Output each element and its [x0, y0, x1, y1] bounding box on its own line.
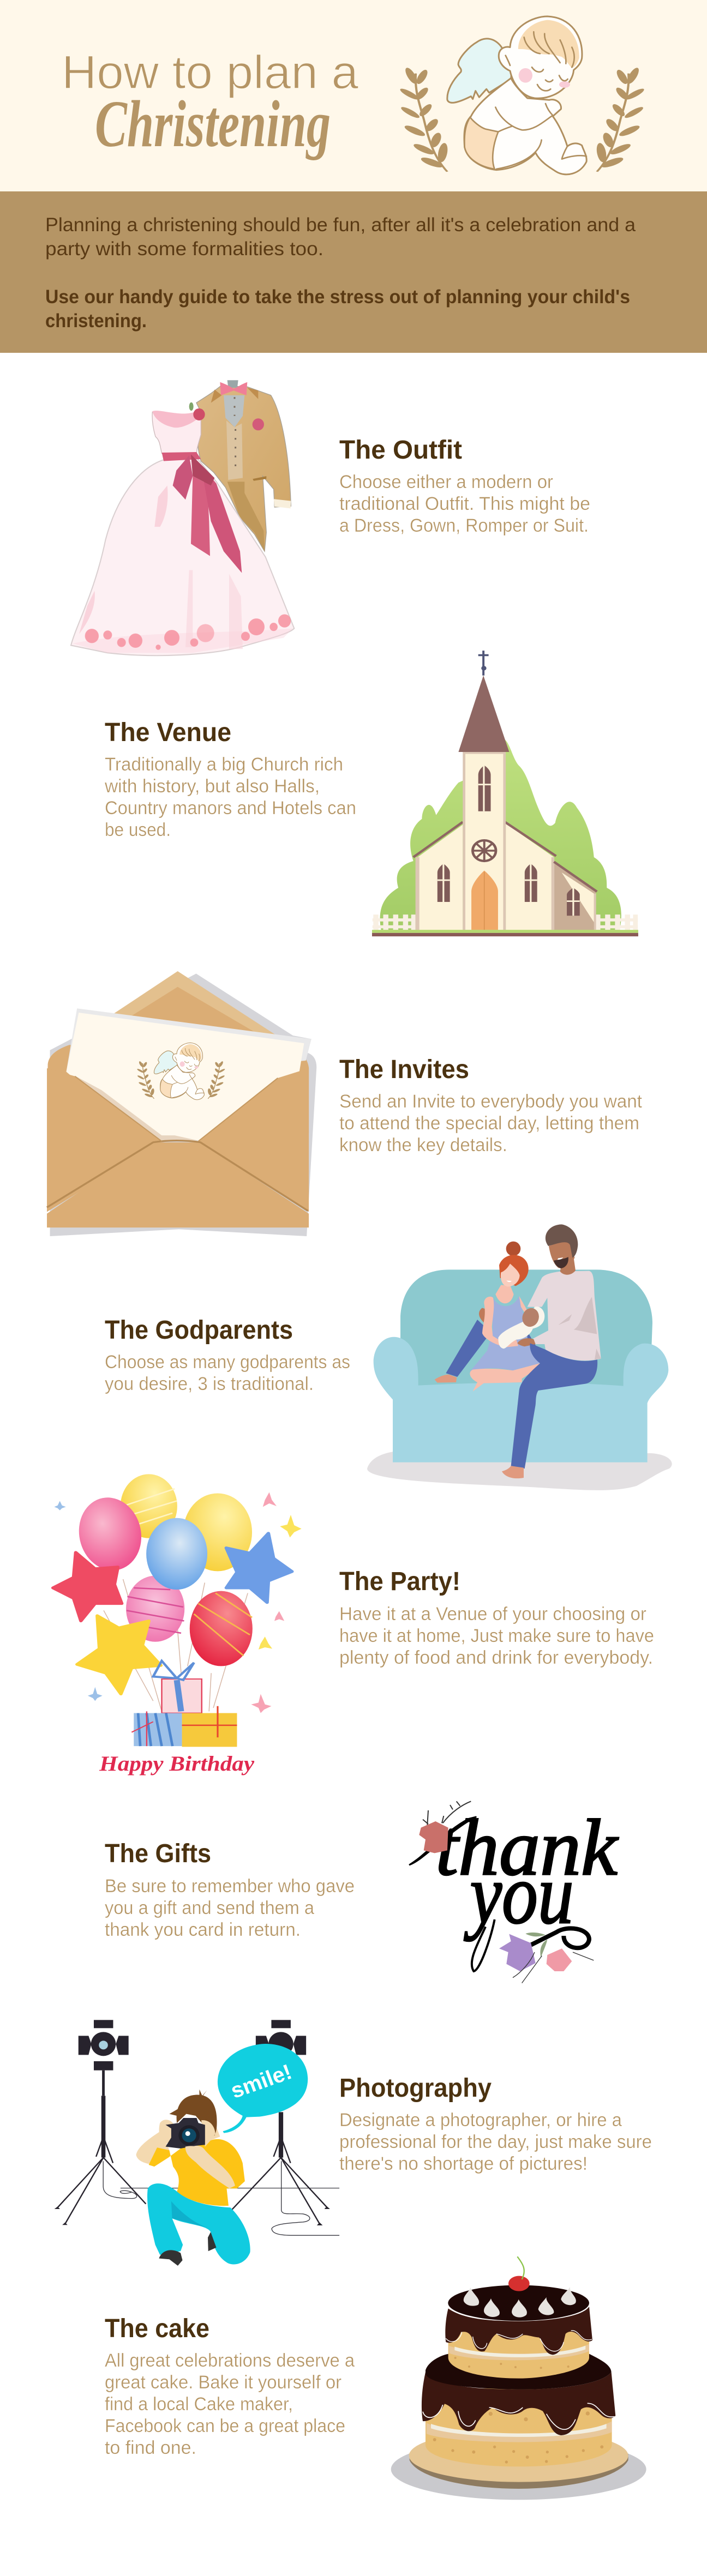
body text: [339, 1091, 643, 1155]
floor shadow: [367, 1450, 672, 1490]
intro text block: party with some formalities too.: [45, 238, 323, 260]
balloon: big yellow: [183, 1493, 252, 1571]
swash: tail and loop: [531, 1928, 589, 1948]
body text: plenty of food and drink for everybody.: [339, 1647, 653, 1668]
left flap: [47, 1068, 161, 1212]
sponge speckles: [433, 2357, 603, 2464]
neck: [205, 2127, 220, 2147]
woman's far leg: [446, 1320, 491, 1377]
balloon: yellow striped: [121, 1474, 177, 1538]
heading: The Godparents: [105, 1316, 293, 1345]
illustration: parents with baby on sofa: [367, 1224, 672, 1490]
swash: bar: [409, 1817, 476, 1865]
ribbon bow: [153, 1661, 194, 1680]
woman's face: [501, 1263, 520, 1286]
text: Happy Birthday: Happy Birthday: [99, 1751, 254, 1775]
lower tier icing highlight: [423, 2403, 615, 2429]
body text: Traditionally a big Church rich: [105, 754, 343, 775]
upper tier filling: [449, 2344, 589, 2360]
body text: to attend the special day, letting them: [339, 1113, 639, 1134]
panel: the cake: [105, 2256, 646, 2500]
diaper: [464, 117, 498, 169]
man's neck: [560, 1258, 576, 1275]
pocket flap: [253, 476, 266, 481]
card: [66, 1013, 304, 1141]
heading: The Outfit: [339, 436, 462, 465]
lower tier filling: [427, 2421, 612, 2442]
illustration: balloons and gifts: [53, 1474, 302, 1775]
heading: The cake: [105, 2314, 209, 2343]
envelope shadow: [50, 974, 316, 1236]
speech bubble: [218, 2044, 308, 2133]
trees: [380, 738, 621, 930]
woman's hair: [499, 1255, 529, 1286]
man's hair: [546, 1224, 578, 1258]
woman's hair bun: [506, 1242, 520, 1256]
body text: All great celebrations deserve a: [105, 2350, 355, 2371]
woman's arm: [482, 1297, 518, 1347]
tower: [463, 752, 506, 930]
swaddled baby: [498, 1307, 544, 1349]
balloon: red: [190, 1591, 253, 1666]
rose window: [472, 840, 496, 861]
pocket rose: [253, 418, 264, 430]
door: [471, 871, 498, 930]
face and hair: [177, 2095, 217, 2136]
illustration: photographer: [55, 2020, 339, 2266]
body text: you desire, 3 is traditional.: [105, 1374, 314, 1394]
panel: photography: [55, 2020, 652, 2266]
intro text block: Use our handy guide to take the stress out of planning your child's: [45, 286, 630, 308]
hand under lens: [185, 2146, 204, 2162]
skirt shading: [73, 485, 293, 653]
plate shadow: [391, 2439, 646, 2500]
lace: [152, 411, 201, 428]
body text: [104, 754, 356, 840]
camera: [166, 2118, 205, 2148]
balloon: pink: [75, 1495, 146, 1573]
face: [506, 56, 568, 91]
shoe: back: [208, 2232, 217, 2251]
envelope back: [47, 1045, 309, 1134]
hair: [518, 20, 579, 68]
body text: thank you card in return.: [105, 1919, 301, 1940]
lettering: you: you: [464, 1846, 574, 1941]
flower: pink: [547, 1948, 572, 1971]
sash waist: [162, 452, 201, 461]
windows: [438, 766, 580, 916]
light: left: [79, 2020, 129, 2158]
title: How to plan a: How to plan a: [62, 46, 358, 99]
sofa back: [400, 1269, 652, 1387]
wing: [447, 39, 511, 103]
limb lines: [495, 104, 586, 169]
upper tier cream: [454, 2346, 585, 2357]
intro text block: christening.: [45, 310, 147, 332]
roof lines: [414, 822, 597, 892]
confetti stars: [251, 1492, 284, 1713]
lower tier top: [426, 2354, 612, 2390]
man's far arm on woman: [479, 1308, 489, 1325]
hem roses: [85, 615, 291, 650]
panel: the outfit: [71, 380, 590, 655]
plate top: [409, 2429, 628, 2482]
panel: header: [0, 0, 707, 191]
star: blue: [226, 1533, 292, 1603]
rose leaf: [189, 402, 194, 411]
panel: the godparents: [105, 1224, 672, 1490]
cheeks: [519, 68, 532, 83]
plate rim: [410, 2454, 628, 2489]
illustration: envelope: [47, 971, 316, 1236]
panel: the party: [53, 1474, 654, 1775]
trousers: [227, 482, 265, 551]
lower tier ganache: [422, 2372, 615, 2435]
sofa arms and seat: [374, 1337, 668, 1462]
panel: the invites: [47, 971, 643, 1236]
intro text block: [45, 214, 636, 332]
body text: traditional Outfit. This might be: [339, 493, 590, 514]
bow: [173, 455, 193, 499]
body text: be used.: [105, 820, 171, 840]
upper tier sponge: [448, 2327, 589, 2379]
body text: great cake. Bake it yourself or: [105, 2372, 341, 2393]
bow tie: [220, 382, 247, 395]
whipped cream dollops: [464, 2287, 576, 2318]
lower tier cream: [431, 2424, 607, 2437]
heading: The Venue: [105, 718, 231, 747]
body text: you a gift and send them a: [105, 1898, 314, 1918]
body text: Facebook can be a great place: [105, 2416, 345, 2436]
body text: [339, 472, 590, 536]
body text: professional for the day, just make sure: [339, 2132, 652, 2152]
heading: The Invites: [339, 1055, 469, 1084]
shoe: front: [159, 2250, 183, 2266]
body text: Be sure to remember who gave: [105, 1876, 355, 1897]
icon: left laurel sprig: [398, 67, 449, 172]
fence: [373, 914, 638, 930]
hand on camera: [159, 2120, 174, 2143]
cables and floor line: [103, 2161, 339, 2235]
nave walls: [418, 823, 554, 930]
body text: Send an Invite to everybody you want: [339, 1091, 643, 1112]
flower: purple: [499, 1934, 536, 1971]
heading: The Gifts: [105, 1839, 211, 1868]
shoulder rose: [193, 408, 205, 420]
body: [464, 78, 586, 174]
panel: the venue: [104, 651, 638, 936]
pants: [147, 2183, 250, 2264]
woman's crossed leg: [470, 1361, 548, 1392]
annex: [554, 862, 596, 930]
body text: [339, 1604, 654, 1668]
illustration: church: [372, 651, 638, 936]
gift: blue: [134, 1713, 182, 1746]
lower sponge upper: [426, 2388, 612, 2431]
jacket: [196, 386, 291, 551]
ground: [372, 930, 638, 933]
gift: pink: [161, 1679, 202, 1713]
lettering: thank: thank: [435, 1803, 619, 1892]
sprig: [423, 1801, 471, 1825]
man's leg behind: [528, 1332, 542, 1356]
balloon: blue: [146, 1518, 207, 1590]
cross: [478, 651, 489, 676]
body text: have it at home, Just make sure to have: [339, 1626, 654, 1646]
cuff: [274, 499, 291, 508]
body text: Choose either a modern or: [339, 472, 553, 492]
icon: baby figure: [447, 16, 586, 174]
man's hand: [517, 1338, 536, 1346]
sash tail long: [201, 465, 242, 573]
waistcoat: [226, 420, 243, 480]
icon: baby on card: [136, 1043, 226, 1100]
balloon: pink striped: [126, 1576, 184, 1642]
panel: the gifts: [105, 1801, 619, 1983]
flower: red: [419, 1821, 448, 1853]
collar: [227, 380, 238, 388]
swash: left descender: [472, 1919, 495, 1971]
head: [499, 16, 582, 98]
panel: intro band: [0, 191, 707, 353]
body text: there's no shortage of pictures!: [339, 2153, 588, 2174]
stems: [513, 1952, 594, 1983]
body text: Choose as many godparents as: [105, 1352, 350, 1373]
body text: know the key details.: [339, 1135, 507, 1155]
bodice: [152, 412, 201, 454]
text: smile!: smile!: [227, 2060, 295, 2103]
icon: right laurel sprig: [595, 67, 646, 172]
man's pants: [511, 1343, 597, 1468]
body text: find a local Cake maker,: [105, 2394, 293, 2415]
card edge: [66, 1008, 311, 1080]
gift: yellow: [182, 1713, 237, 1747]
intro text block: Planning a christening should be fun, after all it's a celebration and a: [45, 214, 636, 236]
arm behind: [136, 2130, 169, 2164]
heading: Photography: [339, 2074, 492, 2103]
front arm: [186, 2146, 235, 2188]
body text: [339, 2110, 652, 2174]
upper tier ganache: [445, 2307, 592, 2355]
shirt: [149, 2139, 245, 2206]
title: Christening script: Christening: [95, 87, 331, 161]
shirt: [224, 395, 244, 427]
body text: a Dress, Gown, Romper or Suit.: [339, 515, 589, 536]
body text: [105, 1352, 350, 1394]
cherry: [508, 2276, 530, 2291]
buttons: [235, 397, 236, 468]
man's face: [549, 1239, 574, 1268]
right flap: [198, 1068, 309, 1212]
upper tier icing highlight: [446, 2331, 592, 2351]
woman's neck: [495, 1285, 514, 1303]
lower tier sponge: [426, 2421, 612, 2466]
stand: left: [57, 2136, 146, 2224]
icon: sleeping angel baby with laurel: [398, 16, 646, 174]
body text: Country manors and Hotels can: [105, 798, 356, 818]
woman's dress: [470, 1295, 550, 1371]
cherry stem: [517, 2256, 524, 2279]
body text: [105, 2350, 355, 2458]
body text: Have it at a Venue of your choosing or: [339, 1604, 646, 1624]
illustration: two-tier chocolate cake: [391, 2256, 646, 2500]
flap seams: [47, 1141, 308, 1211]
light: right: [256, 2020, 306, 2158]
illustration: dress and suit: [71, 380, 294, 655]
sash tail: [191, 476, 210, 556]
leaves: [525, 1933, 547, 1958]
body text: Designate a photographer, or hire a: [339, 2110, 622, 2130]
star: yellow: [77, 1616, 161, 1694]
star: red: [53, 1552, 122, 1621]
stand: right: [231, 2136, 327, 2224]
man's foot: [502, 1466, 524, 1478]
strings: [104, 1579, 248, 1711]
man's sweater: [528, 1271, 601, 1361]
body text: to find one.: [105, 2437, 196, 2458]
spire: [458, 676, 509, 752]
bottom flap: [47, 1142, 309, 1227]
upper tier top: [448, 2285, 589, 2321]
illustration: thank you lettering: [409, 1801, 619, 1983]
heading: The Party!: [339, 1567, 460, 1596]
body text: [105, 1876, 355, 1940]
skirt: [71, 458, 294, 655]
body text: with history, but also Halls,: [104, 776, 320, 797]
wall pillars: [416, 857, 596, 930]
lapels: [211, 388, 258, 403]
back flap: [106, 971, 282, 1039]
